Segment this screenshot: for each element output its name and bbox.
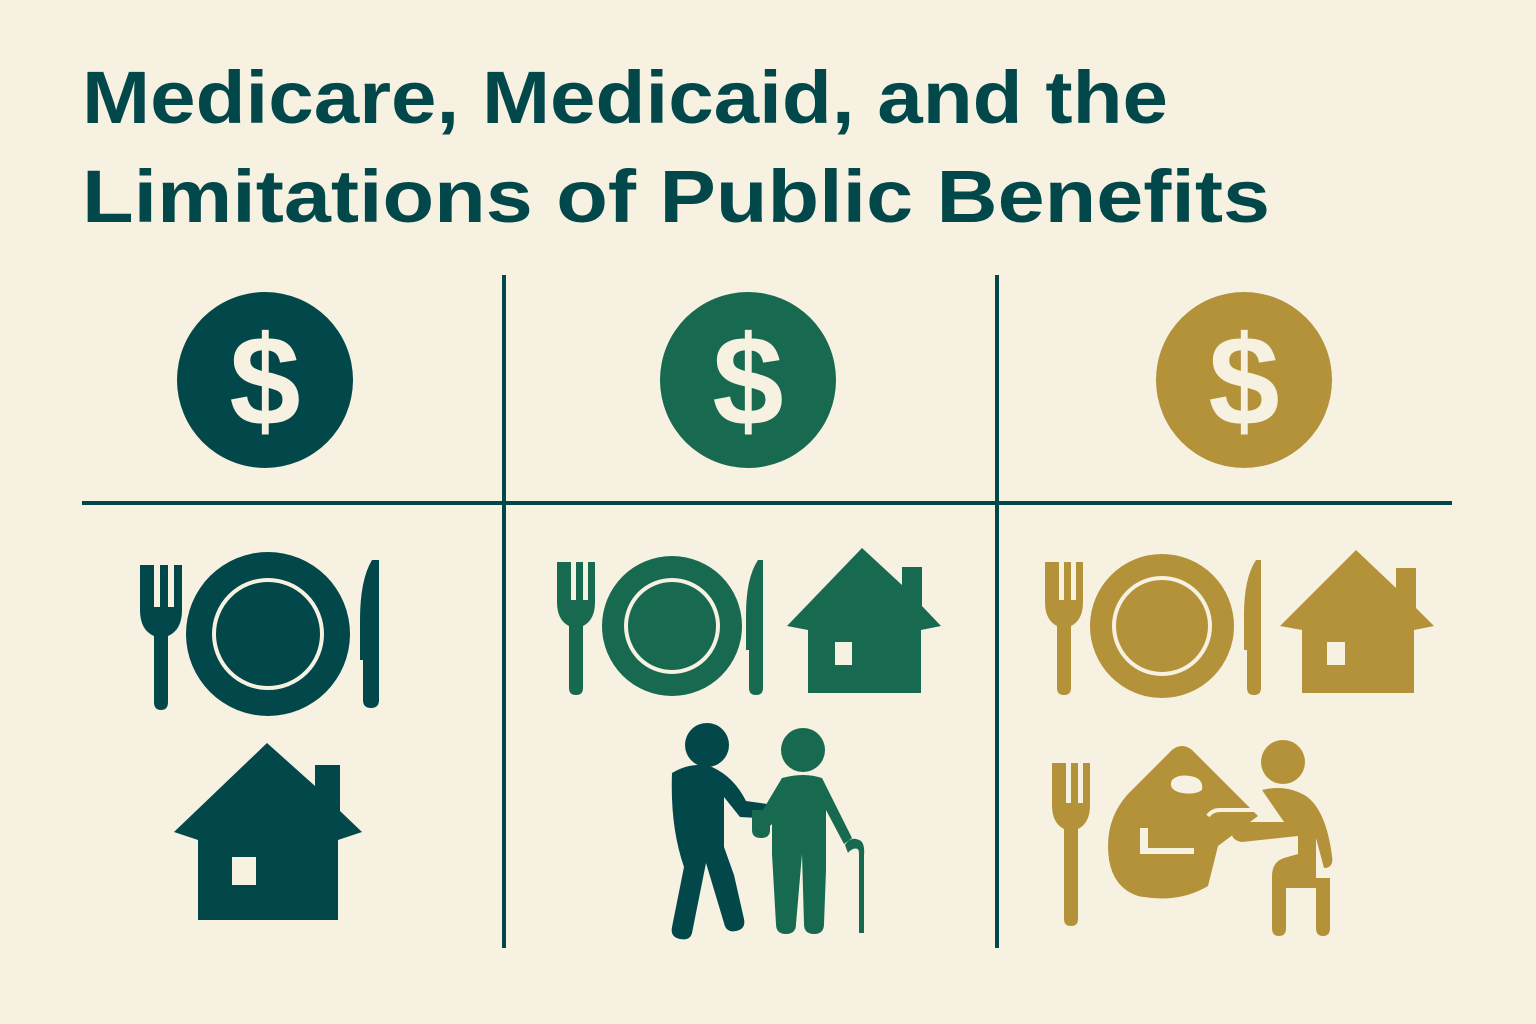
icon: house 1 (174, 743, 362, 920)
icon: dollar coin green (660, 292, 836, 468)
title: Medicare, Medicaid, and the (82, 56, 1168, 139)
icon: house 2 (787, 548, 941, 693)
icon: fork 4 (1052, 763, 1090, 926)
icon: dollar coin teal (177, 292, 353, 468)
title (82, 56, 1270, 238)
icon: dollar coin gold (1156, 292, 1332, 468)
icon: house 3 (1280, 550, 1434, 693)
icon: dollar coin gold: $ (1208, 310, 1280, 453)
icon: seated person with care (1108, 740, 1332, 936)
icon: meal setting 3 (1045, 554, 1261, 698)
icon: caregiver helping elder (672, 723, 864, 939)
icon: meal setting 1 (140, 552, 379, 716)
icon: dollar coin teal: $ (229, 310, 301, 453)
panel: column 3 (1045, 550, 1434, 936)
panel: column 2 (557, 548, 941, 939)
icon: dollar coin green: $ (712, 310, 784, 453)
icon: meal setting 2 (557, 556, 763, 696)
title: Limitations of Public Benefits (82, 155, 1270, 238)
panel: column 1 (140, 552, 379, 920)
